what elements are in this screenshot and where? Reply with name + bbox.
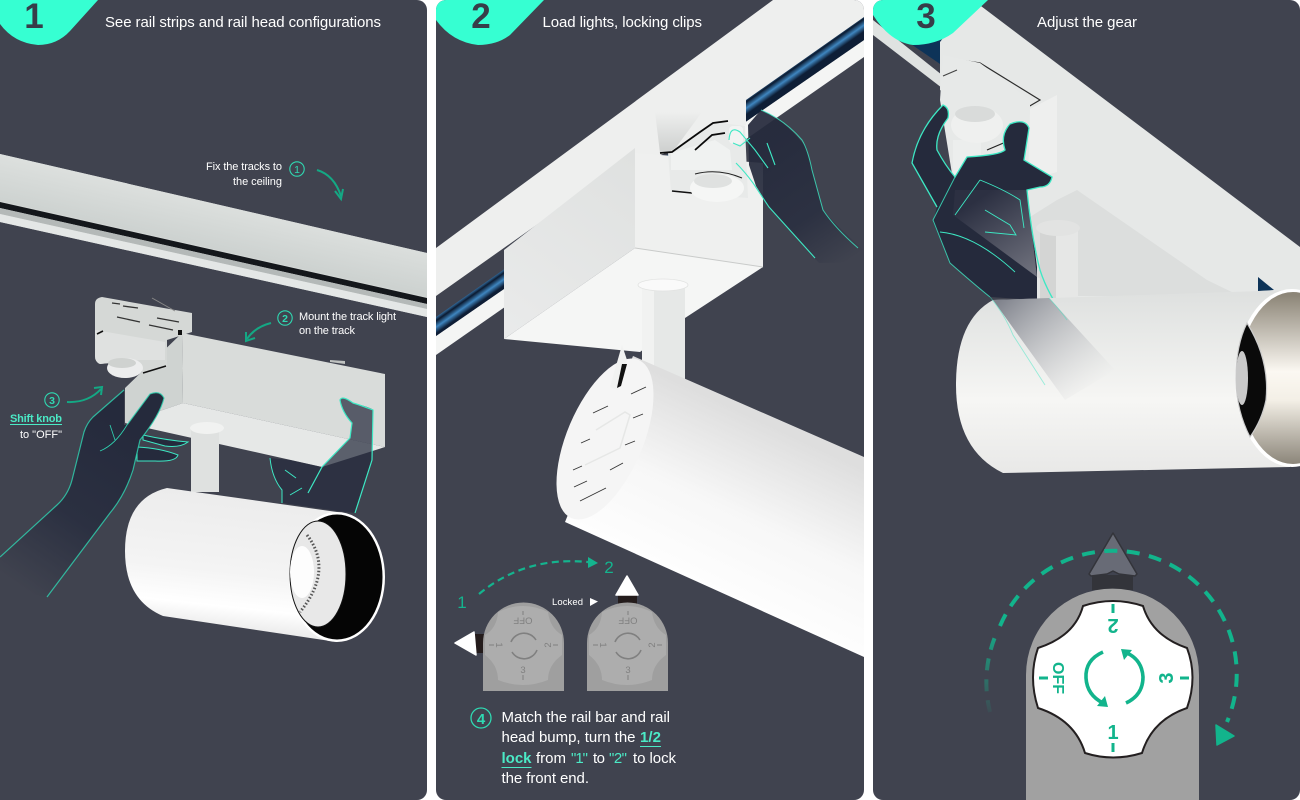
instruction text: lock [502,750,532,767]
instruction text: "1" [571,750,588,767]
instruction text: the front end. [502,770,589,787]
lock dial 2: 1 [597,642,608,648]
hand: right [270,398,373,513]
callout: fix the tracks: 1 [294,164,300,176]
lock dial 1: OFF [513,614,532,625]
callout: shift knob: to "OFF" [20,429,62,441]
instruction text: head bump, turn the [502,729,636,746]
track light box [125,333,385,467]
hand: left [0,390,188,597]
instruction text: 4 [477,711,486,728]
dial knob: 1 [1107,722,1119,744]
callout: mount the light: on the track [299,325,356,337]
rail head adapter [660,121,748,202]
rotation arrow 1 to 2: 2 [604,558,614,577]
instruction text: to lock [633,750,676,767]
callout: fix the tracks: Fix the tracks to [206,161,282,173]
callout: shift knob: 3 [49,395,55,407]
rail head adapter [940,55,1030,180]
instruction text: "2" [609,750,627,767]
dial body [1026,589,1199,800]
rotation arrow 1 to 2 [457,557,614,612]
dial diagram [986,533,1237,800]
callout: shift knob: Shift knob [10,413,62,425]
instruction text [471,708,676,787]
lock dial 1: 1 [493,642,504,648]
light stem [1040,232,1078,298]
heading: step 2: Load lights, locking clips [542,14,702,31]
light stem [190,422,224,492]
panel: step 1 [0,0,427,800]
lock dial 1: 3 [520,665,526,676]
heading: step 3: Adjust the gear [1037,14,1137,31]
light box [504,148,763,352]
instruction text: to [593,750,605,767]
callout: mount the light [246,311,396,341]
dial knob: OFF [1049,662,1066,694]
callout: shift knob [10,387,102,441]
rotation arrow 1 to 2: 1 [457,593,467,612]
track and light box [873,0,1300,300]
rail head adapter [95,297,192,378]
lock dial 1 [455,602,564,691]
lock dial 2: OFF [618,614,638,625]
rotation dashed arc [986,551,1237,745]
track rail [0,154,427,317]
panel: step 3 [873,0,1300,800]
lock dial 2 [587,576,668,691]
hand [911,104,1054,299]
lock dial 2: 3 [625,665,631,676]
dial knob: 2 [1107,614,1119,636]
pointer [1089,533,1137,590]
lock dial 2: 2 [647,642,658,648]
heading: step 1: See rail strips and rail head configurations [105,14,381,31]
light cylinder [125,488,385,642]
track rail [436,0,864,355]
light cylinder [536,345,864,657]
instruction text: 1/2 [640,729,661,746]
lock dial 1: 2 [543,642,554,648]
panel: step 2 [436,0,864,800]
light cylinder [956,289,1300,473]
callout: mount the light: 2 [282,313,288,325]
lock diagrams [455,557,668,691]
dial knob [1033,601,1192,758]
step badge 2 [436,0,544,45]
callout: mount the light: Mount the track light [299,311,396,323]
light stem [638,279,688,382]
rotation arrow 1 to 2: Locked [552,597,583,608]
instruction text: from [536,750,566,767]
callout: fix the tracks [206,161,343,199]
step badge 3 [873,0,988,45]
instruction text: Match the rail bar and rail [502,709,670,726]
dial knob: 3 [1156,672,1178,684]
step badge 1 [0,0,98,45]
callout: fix the tracks: the ceiling [233,176,282,188]
hand [729,110,864,263]
